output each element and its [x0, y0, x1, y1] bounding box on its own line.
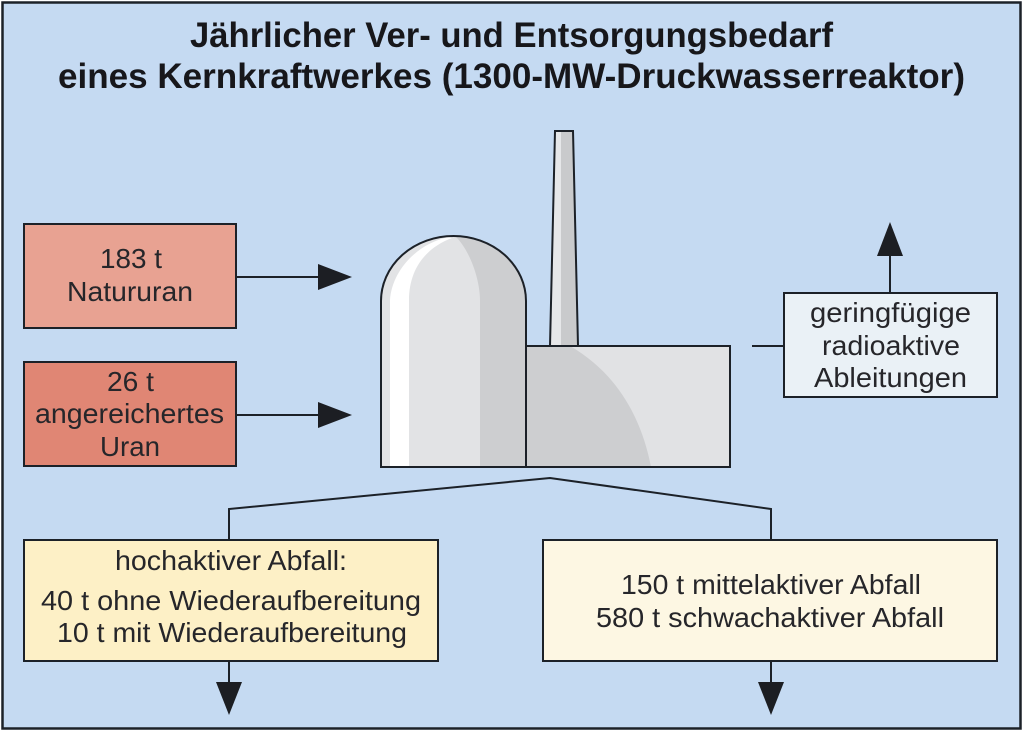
box: hochaktiver Abfall [24, 540, 438, 661]
box: angereichertes Uran: Uran [100, 431, 160, 462]
icon: turbine hall [526, 346, 730, 467]
arrow: enriched uranium to reactor [236, 402, 352, 428]
arrow: high-level waste down [216, 661, 242, 715]
box: angereichertes Uran: 26 t [107, 366, 154, 397]
title: eines Kernkraftwerkes (1300-MW-Druckwasserreaktor) [58, 57, 965, 96]
box: angereichertes Uran [24, 362, 236, 466]
box: radioaktive Ableitungen: radioaktive [822, 330, 960, 361]
box: hochaktiver Abfall: hochaktiver Abfall: [115, 545, 347, 576]
title [58, 16, 965, 96]
title: Jährlicher Ver- und Entsorgungsbedarf [190, 16, 833, 55]
box: Natururan: 183 t [100, 243, 162, 274]
connector: waste branches [229, 478, 771, 540]
box: mittel- und schwachaktiver Abfall: 150 t mittelaktiver Abfall [621, 569, 921, 600]
box: angereichertes Uran: angereichertes [35, 398, 224, 429]
box: hochaktiver Abfall: 10 t mit Wiederaufbereitung [57, 617, 407, 648]
arrow: low-level waste down [758, 661, 784, 715]
box: mittel- und schwachaktiver Abfall: 580 t schwachaktiver Abfall [596, 602, 944, 633]
box: radioaktive Ableitungen: Ableitungen [814, 362, 967, 393]
box: hochaktiver Abfall: 40 t ohne Wiederaufbereitung [41, 585, 421, 616]
box: Natururan [24, 224, 236, 328]
box: radioaktive Ableitungen: geringfügige [810, 297, 971, 328]
icon: reactor dome [381, 236, 526, 467]
arrow: discharge line and upward arrow [752, 222, 903, 346]
icon: chimney [550, 131, 578, 346]
arrow: Natururan to reactor [236, 264, 352, 290]
box: radioaktive Ableitungen [784, 293, 997, 397]
box: mittel- und schwachaktiver Abfall [543, 540, 997, 661]
box: Natururan: Natururan [67, 276, 193, 307]
